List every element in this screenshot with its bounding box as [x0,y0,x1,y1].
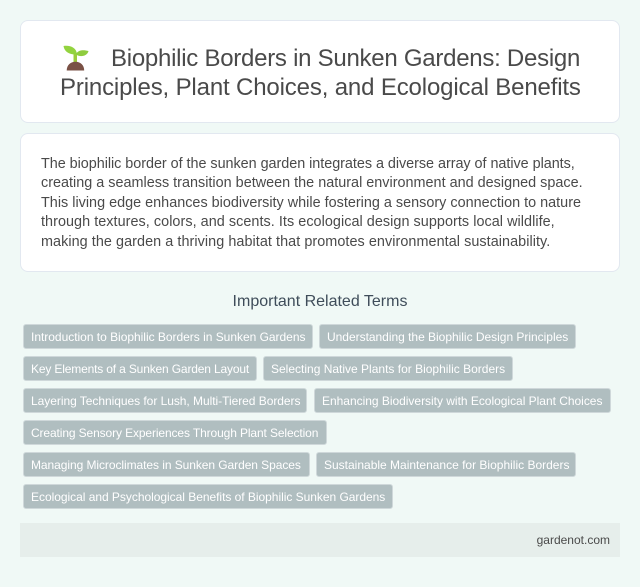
tag: Introduction to Biophilic Borders in Sunken Gardens [31,330,305,344]
heading: related terms: Important Related Terms [233,293,407,310]
tag: Creating Sensory Experiences Through Plant Selection [31,426,318,440]
panel: description card [20,133,620,272]
tag [319,324,576,349]
icon: seedling [64,46,88,70]
title [60,45,581,101]
tag [23,356,257,381]
description text: The biophilic border of the sunken garden integrates a diverse array of native plants, [41,156,575,172]
description text: through textures, colors, and scents. Its ecological design supports local wildlife, [41,214,555,230]
panel: title card [20,20,620,123]
footer bar [20,523,620,557]
tag: Understanding the Biophilic Design Principles [327,330,568,344]
title: Biophilic Borders in Sunken Gardens: Design [111,45,580,72]
tag [263,356,513,381]
tag: Selecting Native Plants for Biophilic Borders [271,362,505,376]
footer source text: gardenot.com [537,533,610,547]
tag: Managing Microclimates in Sunken Garden Spaces [31,458,301,472]
tag [23,324,313,349]
tag [316,452,576,477]
tag: Layering Techniques for Lush, Multi-Tiered Borders [31,394,300,408]
tag: Sustainable Maintenance for Biophilic Borders [324,458,569,472]
tag [23,484,393,509]
tag: Enhancing Biodiversity with Ecological Plant Choices [322,394,602,408]
description text [41,156,583,250]
title: Principles, Plant Choices, and Ecological Benefits [60,74,581,101]
tag [23,420,327,445]
tag: Ecological and Psychological Benefits of Biophilic Sunken Gardens [31,490,385,504]
panel: related term tags [23,324,611,509]
tag [23,388,307,413]
description text: making the garden a thriving habitat that promotes environmental sustainability. [41,234,550,250]
description text: This living edge enhances biodiversity while fostering a sensory connection to nature [41,194,581,210]
tag: Key Elements of a Sunken Garden Layout [31,362,249,376]
tag [314,388,611,413]
tag [23,452,310,477]
description text: creating a seamless transition between the natural environment and designed space. [41,175,583,191]
